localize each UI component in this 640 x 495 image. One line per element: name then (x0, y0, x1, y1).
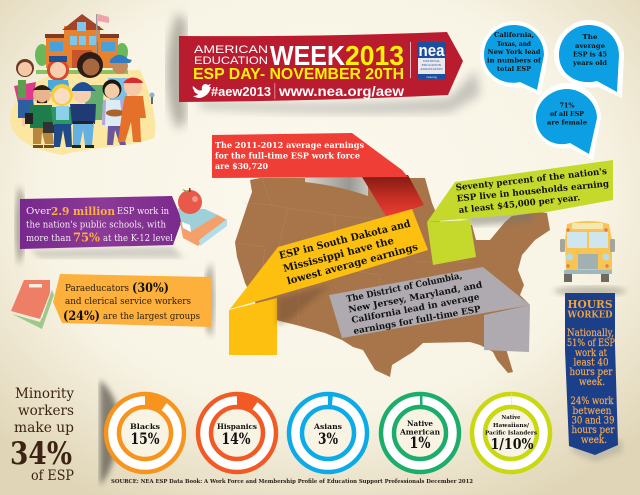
speech bubble: female share: are female (547, 118, 588, 126)
heading: hours worked: HOURS (568, 298, 613, 311)
speech bubble: states: in numbers of (487, 56, 542, 64)
body text: week. (581, 435, 607, 446)
speech bubble: average age: The (582, 33, 598, 41)
icon: twitter bird (193, 84, 211, 98)
grille (578, 254, 598, 269)
ribbon: highest earnings: The District of Columbia, (346, 271, 463, 305)
fold shade (305, 177, 368, 196)
website: www.nea.org/aew (278, 84, 405, 99)
heading: Week 2013 (270, 40, 404, 71)
panel: 2.9 million ESP: more than (26, 234, 71, 244)
logo: NEA: EDUCATION (422, 63, 442, 67)
person: blue cap worker (108, 55, 132, 102)
donut: native american: American (399, 428, 441, 436)
donut: native hawaiians: Native (502, 415, 521, 421)
ribbon lower fold (229, 298, 277, 355)
speech bubble: average age: ESP is 45 (573, 50, 607, 58)
person: cafeteria worker (102, 80, 126, 145)
panel: paraeducators: are the largest groups (103, 312, 200, 322)
donut: hispanics (198, 393, 276, 472)
ribbon: lowest earnings: ESP in South Dakota and (278, 219, 412, 262)
speech bubble: average age (554, 20, 624, 98)
ribbon lower fold (362, 175, 424, 218)
ribbon lower fold (427, 220, 476, 265)
donut: blacks: Blacks (130, 422, 160, 431)
speech bubble: states: New York lead (488, 48, 541, 56)
ribbon: highest earnings (329, 267, 530, 352)
ribbon: seventy percent: Seventy percent of the nation's (455, 167, 607, 193)
icon: apple and books (178, 188, 227, 246)
heading: American Education (194, 44, 268, 67)
heading: Week 2013: WEEK (270, 40, 345, 71)
logo: NEA: NATIONAL (423, 59, 440, 63)
body text (567, 328, 615, 446)
illustration: school and staff (10, 14, 155, 155)
body text: hours per (570, 367, 613, 378)
heading: ESP Day: ESP DAY- NOVEMBER 20TH (193, 66, 404, 83)
panel: 2.9 million ESP: 75% (73, 230, 101, 244)
bus body (565, 221, 612, 270)
ribbon: highest earnings: California lead in average (351, 292, 481, 326)
ribbon: highest earnings: New Jersey, Maryland, and (348, 280, 483, 315)
speech bubble: states: Texas, and (497, 40, 531, 48)
donut: native american: 1% (410, 433, 430, 452)
logo: NEA: nea.org (426, 75, 437, 79)
body text: week. (579, 377, 605, 388)
banner: American Education Week (179, 32, 463, 102)
donut: asians: Asians (313, 422, 342, 431)
hashtag: #aew2013 (211, 84, 271, 99)
speech bubble: female share: of all ESP (550, 110, 584, 118)
body text: 30 and 39 (572, 416, 614, 426)
ribbon: lowest earnings: lowest average earnings (286, 242, 420, 287)
ribbon: average earnings: are $30,720 (215, 161, 268, 171)
body text: Nationally, (567, 328, 614, 339)
speech bubble: female share (533, 83, 601, 160)
ribbon face (230, 209, 428, 309)
ribbon: lowest earnings: Mississippi have the (282, 236, 395, 275)
school building (35, 14, 128, 74)
speech bubble: average age: years old (572, 59, 607, 67)
body text: hours per (572, 425, 615, 436)
speech bubble: states: California, (494, 31, 534, 39)
person: nurse (77, 52, 104, 120)
logo: NEA: ASSOCIATION (419, 67, 443, 71)
panel: paraeducators: Paraeducators (65, 284, 129, 294)
ribbon: average earnings (212, 133, 424, 218)
speech bubble: states: total ESP (497, 65, 531, 73)
text block: minority workers (10, 386, 74, 484)
person: blonde woman (51, 84, 73, 147)
bumper and mirrors (564, 270, 612, 274)
ribbon: seventy percent (427, 160, 613, 265)
heading: hours worked: WORKED (567, 310, 613, 320)
donut: blacks (106, 393, 184, 472)
divider shadow (100, 380, 119, 485)
panel: 2.9 million ESP (15, 185, 184, 266)
logo: NEA (417, 41, 446, 79)
banner shadow (167, 12, 186, 130)
speech bubble: average age: average (575, 42, 606, 50)
panel: 2.9 million ESP: the nation's public schools, with (26, 220, 166, 230)
ribbon: seventy percent: ESP live in households earning (456, 179, 610, 204)
body text: work at (575, 348, 607, 359)
body text: least 40 (574, 358, 608, 368)
body text: between (572, 406, 612, 417)
ribbon face (212, 133, 408, 178)
text block: minority workers: of ESP (31, 468, 74, 484)
panel: 2.9 million ESP: at the K-12 level (103, 234, 173, 244)
map: United States (235, 178, 550, 377)
donut: native hawaiians (472, 393, 550, 472)
panel: paraeducators: and clerical service workers (65, 297, 191, 307)
donut: native hawaiians: 1/10% (490, 436, 534, 453)
donut: hispanics: 14% (222, 429, 250, 448)
heading: hours worked (567, 298, 613, 320)
ribbon: average earnings: for the full-time ESP work force (215, 150, 360, 160)
yellow ground (10, 70, 155, 155)
ribbon: highest earnings: earnings for full-time ESP (353, 305, 482, 337)
person: worker in orange jumpsuit (118, 77, 154, 142)
windows (567, 232, 587, 248)
person: pink top woman (14, 59, 36, 126)
ribbon: hours worked (554, 286, 626, 462)
panel: 2.9 million ESP: 2.9 million (51, 205, 115, 218)
person: police officer (47, 56, 70, 92)
heading: Week 2013: 2013 (345, 40, 404, 71)
heading: American Education: AMERICAN (194, 44, 268, 56)
panel: 2.9 million ESP: Over (26, 207, 52, 217)
panel: paraeducators (53, 262, 215, 338)
body text: 51% of ESP (567, 338, 615, 349)
panel: paraeducators: (24%) (63, 309, 100, 324)
donut: asians: 3% (318, 429, 338, 448)
speech bubble: states (480, 21, 548, 96)
ribbon: lowest earnings (229, 209, 428, 355)
person: man in green shirt (25, 85, 55, 148)
donut: asians (289, 393, 367, 472)
state lines (238, 178, 470, 330)
ribbon: seventy percent: at least $45,000 per year. (458, 193, 581, 216)
school bus (560, 221, 615, 282)
panel: paraeducators: (30%) (132, 281, 169, 296)
wheels (564, 272, 572, 282)
text block: minority workers: Minority (15, 386, 74, 402)
speech bubble: female share: 71% (560, 102, 575, 110)
donut: blacks: 15% (130, 429, 160, 448)
text block: minority workers: make up (14, 420, 74, 436)
logo: NEA: nea (418, 41, 445, 60)
icon: stacked books (11, 280, 54, 329)
donut: native american: Native (407, 419, 433, 428)
donut: native hawaiians: Pacific Islanders (485, 430, 537, 436)
panel: 2.9 million ESP: ESP work in (117, 207, 169, 217)
source line: SOURCE: NEA ESP Data Book: A Work Force and Membership Profile of Education Support Professionals December 2012 (111, 479, 473, 485)
ribbon face (427, 160, 613, 222)
donut: native hawaiians: Hawaiians/ (493, 423, 530, 429)
ribbon lower fold (484, 305, 530, 352)
donut: hispanics: Hispanics (217, 422, 257, 431)
ribbon: average earnings: The 2011-2012 average earnings (215, 140, 364, 150)
ribbon face (329, 267, 530, 338)
text block: minority workers: workers (18, 403, 74, 419)
body text: 24% work (570, 396, 614, 407)
heading: American Education: EDUCATION (194, 55, 268, 67)
donut: native american (381, 393, 459, 472)
text block: minority workers: 34% (10, 436, 72, 472)
person: man in navy uniform (70, 82, 96, 148)
